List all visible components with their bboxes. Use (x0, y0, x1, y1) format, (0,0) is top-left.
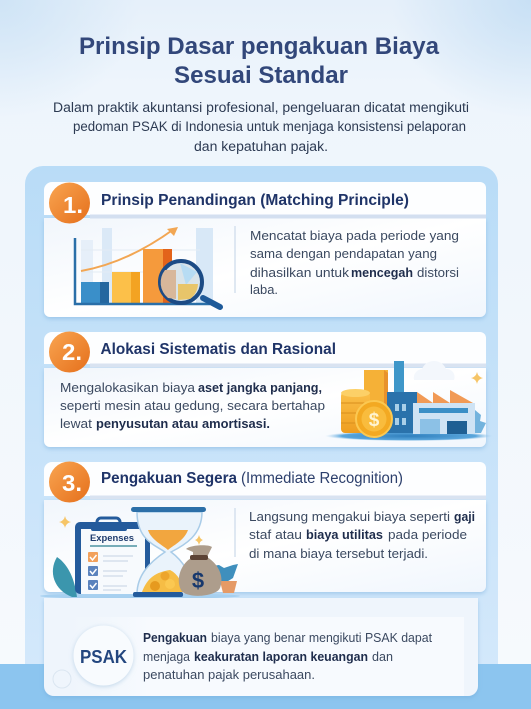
card 3 body (44, 500, 486, 592)
card 1 header (44, 182, 486, 215)
money bag (179, 545, 221, 596)
icon: expenses clipboard and hourglass: $ (192, 568, 204, 593)
card 3 text: staf atau (249, 527, 302, 542)
card 2 text: Mengalokasikan biaya (60, 380, 196, 395)
card 3 text: di mana biaya tersebut terjadi. (249, 546, 428, 561)
number badge 1 (49, 182, 90, 224)
title: Prinsip Dasar pengakuan Biaya (79, 33, 440, 60)
PSAK badge (74, 626, 134, 686)
card 1 text: laba. (250, 282, 278, 297)
intro text: Dalam praktik akuntansi profesional, pengeluaran dicatat mengikuti (53, 100, 469, 115)
summary text: penatuhan pajak perusahaan. (143, 667, 315, 682)
card 2 body (44, 368, 486, 447)
heading 2: Alokasi Sistematis dan Rasional (100, 341, 336, 358)
bottom blue band (0, 664, 531, 709)
card 1 text: Mencatat biaya pada periode yang (250, 228, 459, 243)
card 1 body (44, 218, 486, 317)
card 2 text (60, 380, 325, 431)
card 3 text (249, 509, 475, 561)
card 1 text: mencegah (351, 265, 413, 280)
card 2 header (44, 332, 486, 364)
left plant (53, 557, 77, 597)
heading 3 (101, 470, 403, 487)
intro text: dan kepatuhan pajak. (194, 139, 328, 154)
summary text: dan (372, 649, 393, 664)
card 1 text: sama dengan pendapatan yang (250, 246, 437, 261)
card 3 text: pada periode (388, 527, 467, 542)
icon: expenses clipboard and hourglass (40, 507, 240, 599)
card 3 text: biaya utilitas (306, 527, 383, 542)
card 3 header (44, 462, 486, 496)
heading 1: Prinsip Penandingan (Matching Principle) (101, 192, 409, 209)
icon: bar chart with magnifier (75, 227, 220, 307)
number badge 3: 3. (62, 470, 82, 496)
number badge 2 (49, 332, 90, 372)
card 1 text (250, 228, 459, 297)
panel: PSAK summary (44, 598, 478, 696)
card 3 text: Langsung mengakui biaya seperti (249, 509, 450, 524)
heading 3: Pengakuan Segera (101, 470, 237, 487)
summary text (143, 630, 432, 682)
summary text: keakuratan laporan keuangan (194, 649, 368, 664)
panel: card 2 (44, 332, 493, 447)
card 2 text: penyusutan atau amortisasi. (96, 416, 270, 431)
card 2 text: lewat (60, 416, 92, 431)
icon: coins and factory: $ (369, 410, 380, 431)
card 3 text: gaji (454, 509, 475, 524)
card 1 text: dihasilkan untuk (250, 265, 350, 280)
summary text: Pengakuan (143, 630, 207, 645)
right plant (212, 564, 238, 583)
number badge 3 (49, 462, 90, 502)
intro text: pedoman PSAK di Indonesia untuk menjaga konsistensi pelaporan (73, 119, 466, 134)
main blue panel (25, 166, 498, 664)
summary text: biaya yang benar mengikuti PSAK dapat (211, 630, 432, 645)
cloud (414, 361, 455, 380)
title (79, 33, 440, 89)
card 2 text: aset jangka panjang, (198, 380, 322, 395)
decorative bubbles (53, 670, 71, 688)
icon: coins and factory (325, 361, 493, 441)
panel: card 1 (44, 182, 486, 317)
card 2 text: seperti mesin atau gedung, secara bertahap (60, 398, 325, 413)
number badge 2: 2. (62, 339, 82, 365)
heading 3: (Immediate Recognition) (241, 470, 403, 487)
panel: card 3 (40, 462, 486, 599)
icon: expenses clipboard and hourglass: Expenses (90, 533, 134, 543)
card 1 text: distorsi (417, 265, 459, 280)
PSAK badge: PSAK (80, 647, 127, 667)
summary text: menjaga (143, 649, 191, 664)
intro text (53, 100, 469, 154)
number badge 1: 1. (63, 192, 83, 218)
title: Sesuai Standar (174, 62, 348, 89)
